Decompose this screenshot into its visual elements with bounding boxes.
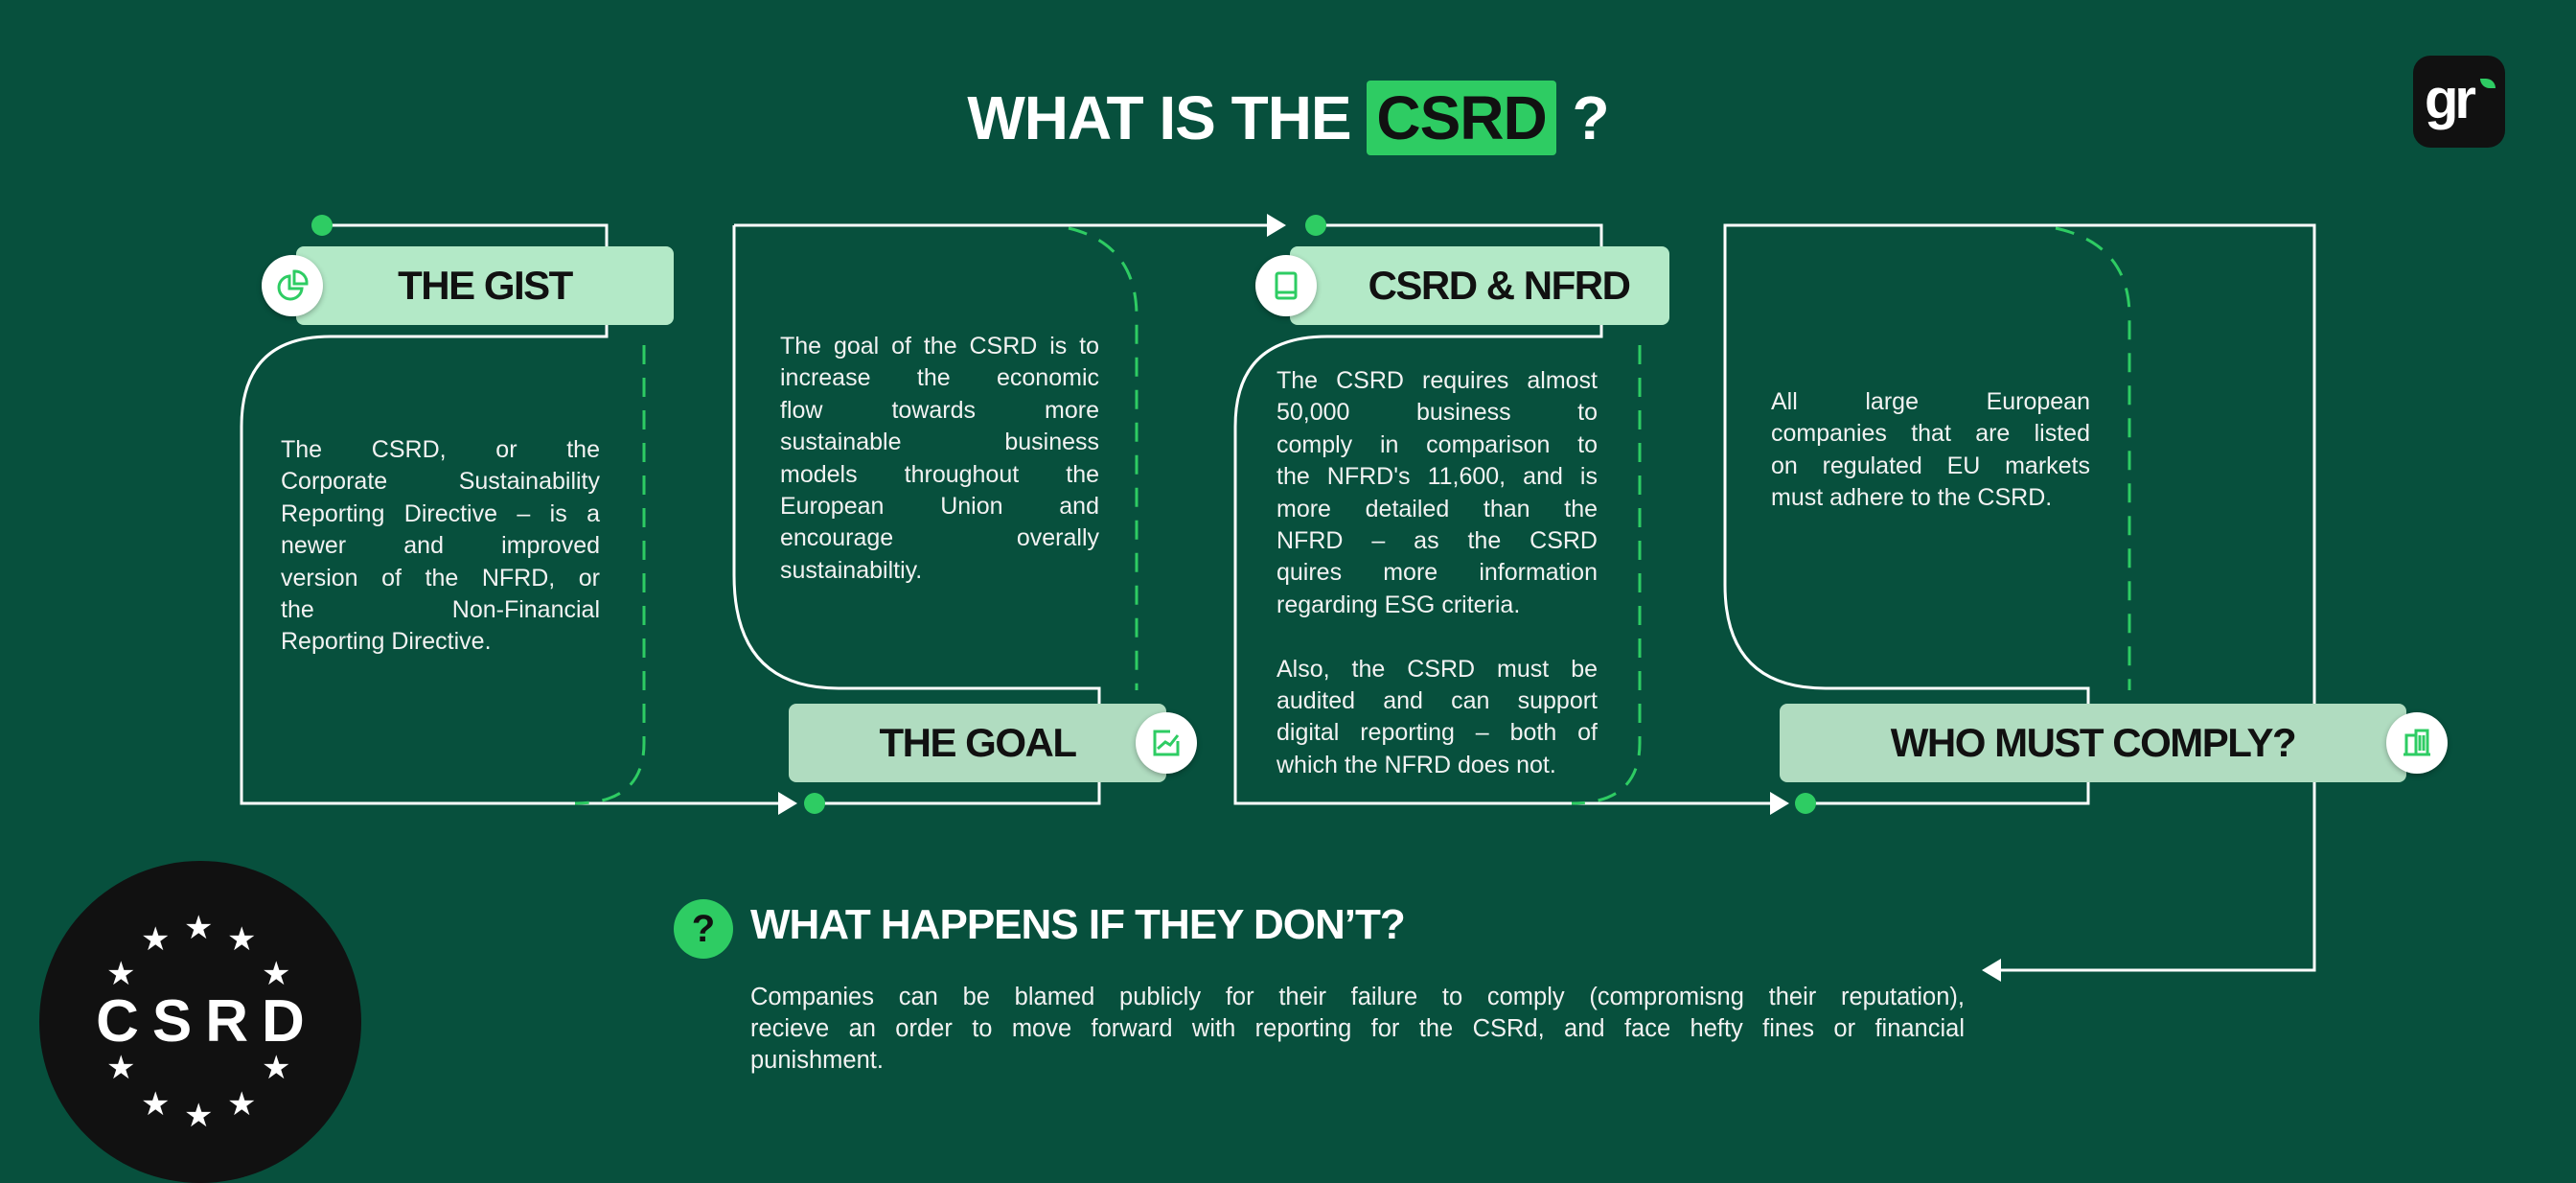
text: csrd & nfrd: regarding ESG criteria. [1276, 592, 1520, 618]
text: consequences: recieve an order to move forward with reporting for the CSRd, and face hefty fines or financial [750, 1015, 1965, 1042]
text: gist [281, 436, 600, 655]
text: csrd & nfrd: quires more information [1276, 559, 1598, 586]
text: goal: encourage overally [780, 524, 1099, 551]
badge: csrd stars [39, 861, 361, 1183]
text: consequences: punishment. [750, 1047, 884, 1074]
heading: what happens: WHAT HAPPENS IF THEY DON’T? [750, 901, 1405, 948]
badge: csrd stars: ★ [141, 1086, 170, 1123]
text: csrd & nfrd: 50,000 business to [1276, 399, 1598, 426]
badge: csrd stars: ★ [227, 1086, 256, 1123]
badge: csrd stars: ★ [106, 956, 135, 992]
title: WHAT IS THE [967, 83, 1351, 152]
badge: csrd stars: ★ [184, 1098, 213, 1134]
text: csrd & nfrd: which the NFRD does not. [1276, 752, 1556, 778]
text: goal: models throughout the [780, 461, 1099, 488]
title [967, 81, 1609, 155]
label: csrd & nfrd: CSRD & NFRD [1368, 263, 1629, 308]
text: goal: increase the economic [780, 364, 1099, 391]
label: who must comply [1780, 704, 2406, 782]
text: csrd & nfrd: the NFRD's 11,600, and is [1276, 463, 1598, 490]
text: who: All large European [1771, 388, 2090, 415]
logo: gr [2413, 56, 2505, 148]
icon: buildings [2386, 712, 2448, 774]
label: the gist [296, 246, 674, 325]
icon: pie chart [262, 255, 323, 316]
text: csrd & nfrd: comply in comparison to [1276, 431, 1598, 458]
label: csrd & nfrd [1290, 246, 1669, 325]
icon: growth chart [1136, 712, 1197, 774]
text: who: on regulated EU markets [1771, 452, 2090, 479]
text: gist: The CSRD, or the [281, 436, 600, 463]
text: goal: European Union and [780, 493, 1099, 520]
badge: csrd stars: ★ [106, 1050, 135, 1086]
text: gist: version of the NFRD, or [281, 565, 600, 592]
icon: question [674, 899, 733, 959]
text: csrd & nfrd: Also, the CSRD must be [1276, 656, 1598, 683]
icon: book [1255, 255, 1317, 316]
title: CSRD [1376, 83, 1547, 152]
text: gist: Reporting Directive – is a [281, 500, 600, 527]
title: ? [1573, 83, 1609, 152]
text: who: companies that are listed [1771, 420, 2090, 447]
text: who: must adhere to the CSRD. [1771, 484, 2052, 511]
text: consequences: Companies can be blamed publicly for their failure to comply (compromisng their reputation), [750, 984, 1965, 1010]
text: goal: sustainabiltiy. [780, 557, 922, 584]
text: who [1771, 388, 2090, 511]
label: the gist: THE GIST [398, 263, 572, 308]
badge: csrd stars: ★ [141, 921, 170, 958]
text: goal [780, 333, 1099, 584]
badge: csrd stars: ★ [262, 956, 290, 992]
label: the goal [789, 704, 1166, 782]
text: goal: sustainable business [780, 429, 1099, 455]
badge: csrd stars: ★ [184, 910, 213, 946]
logo: gr: gr [2425, 68, 2472, 130]
badge: csrd stars: ★ [227, 921, 256, 958]
text: csrd & nfrd: The CSRD requires almost [1276, 367, 1598, 394]
text: csrd & nfrd: NFRD – as the CSRD [1276, 527, 1598, 554]
text: csrd & nfrd [1276, 367, 1598, 778]
badge: csrd stars: CSRD [96, 988, 318, 1055]
text: consequences [750, 984, 1965, 1074]
text: goal: flow towards more [780, 397, 1099, 424]
label: who must comply: WHO MUST COMPLY? [1891, 720, 2295, 765]
text: gist: the Non-Financial [281, 596, 600, 623]
icon: question: ? [692, 907, 715, 949]
badge: csrd stars: ★ [262, 1050, 290, 1086]
text: csrd & nfrd: digital reporting – both of [1276, 719, 1598, 746]
label: the goal: THE GOAL [880, 720, 1075, 765]
text: gist: newer and improved [281, 532, 600, 559]
text: csrd & nfrd: audited and can support [1276, 687, 1598, 714]
text: gist: Corporate Sustainability [281, 468, 600, 495]
text: gist: Reporting Directive. [281, 628, 492, 655]
text: goal: The goal of the CSRD is to [780, 333, 1099, 360]
text: csrd & nfrd: more detailed than the [1276, 496, 1598, 522]
